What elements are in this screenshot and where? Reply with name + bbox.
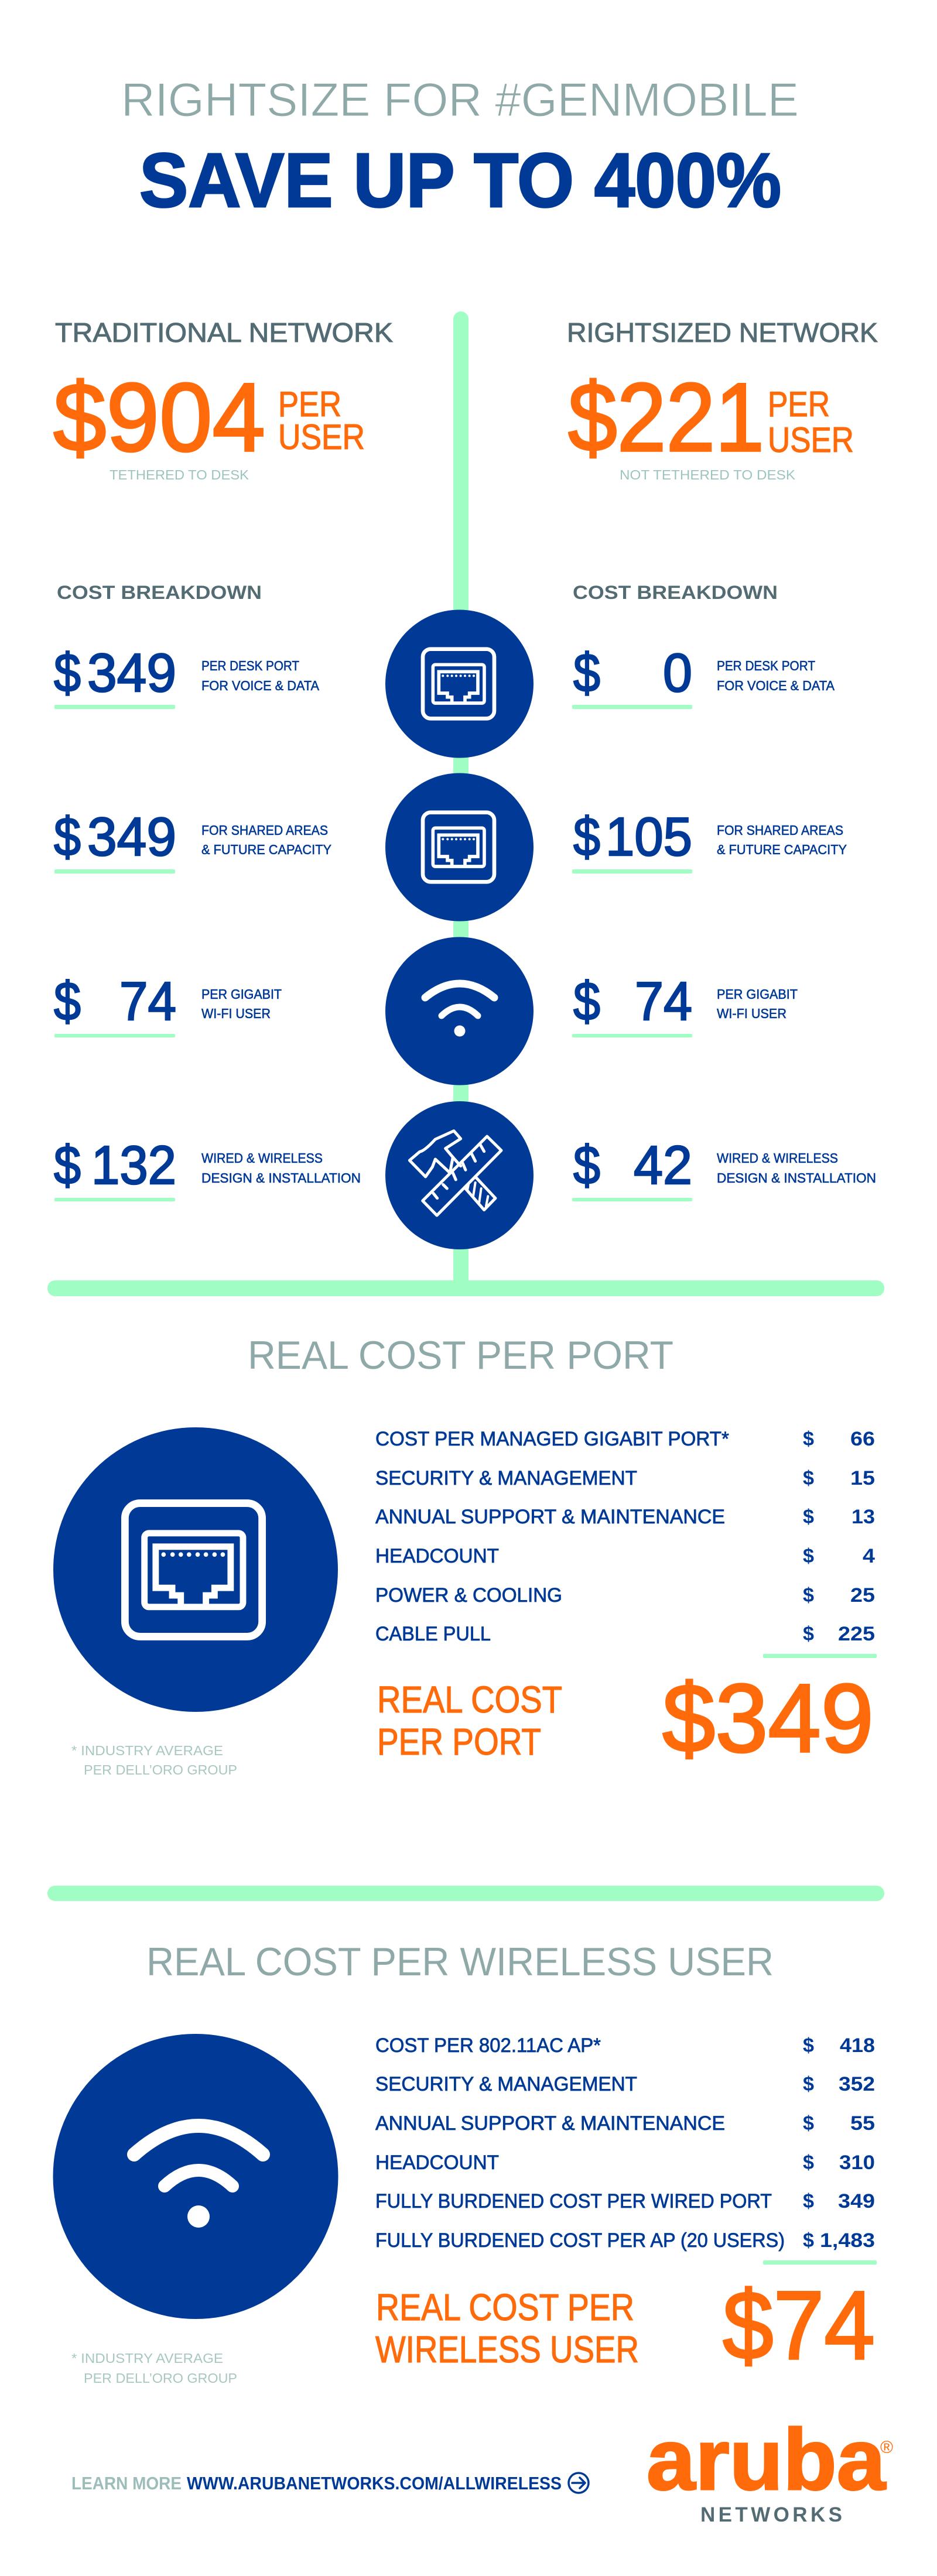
row 2 left: shared areas: & FUTURE CAPACITY <box>201 842 331 857</box>
table: cost per wireless user: FULLY BURDENED COST PER AP (20 USERS) <box>375 2229 785 2252</box>
icon: wifi large circle <box>53 2034 338 2319</box>
table: cost per wireless user: 349 <box>838 2190 875 2212</box>
heading: real cost per port: REAL COST PER PORT <box>248 1333 673 1378</box>
table: cost per port: $ <box>803 1623 814 1645</box>
row 2 right: shared areas: $ <box>573 806 600 867</box>
row 2 right: shared areas: & FUTURE CAPACITY <box>717 842 847 857</box>
footnote: industry average wireless <box>71 2351 237 2386</box>
row 1 left: per desk port: FOR VOICE & DATA <box>201 678 320 693</box>
unit: per user <box>278 385 365 457</box>
total: real cost per wireless user: $74 <box>723 2272 875 2380</box>
row 1 left: per desk port: PER DESK PORT <box>201 658 299 673</box>
divider bar: end of cost breakdown <box>47 1280 884 1296</box>
table: cost per port: $ <box>803 1584 814 1606</box>
row 1 left: per desk port <box>54 642 320 709</box>
row 4 right: design and installation: DESIGN & INSTALLATION <box>717 1170 876 1186</box>
row 2 left: shared areas: $ <box>54 806 81 867</box>
total: real cost per port: REAL COST <box>377 1678 562 1721</box>
footnote: industry average port: * INDUSTRY AVERAGE <box>71 1743 223 1758</box>
caption: not tethered to desk: NOT TETHERED TO DESK <box>620 467 796 482</box>
row 3 left: gigabit wifi user: $ <box>54 971 81 1032</box>
table: cost per port: SECURITY & MANAGEMENT <box>375 1467 637 1489</box>
row 3 left: gigabit wifi user: WI-FI USER <box>201 1006 271 1021</box>
table: cost per wireless user: HEADCOUNT <box>375 2152 499 2174</box>
icon: ethernet port large circle <box>53 1427 338 1712</box>
table: cost per wireless user <box>375 2034 877 2265</box>
row 2 left: shared areas <box>54 806 331 873</box>
central timeline connector <box>453 311 468 1282</box>
heading: cost breakdown left: COST BREAKDOWN <box>57 582 262 603</box>
row 3 right: gigabit wifi user: $ <box>573 971 600 1032</box>
value: 221 per user: $221 <box>568 364 764 472</box>
table: cost per port: 25 <box>850 1584 875 1606</box>
row 4 right: design and installation: 42 <box>634 1135 692 1195</box>
table: cost per wireless user: 310 <box>839 2152 875 2174</box>
caption: tethered to desk: TETHERED TO DESK <box>110 467 249 482</box>
table: cost per port: HEADCOUNT <box>375 1545 499 1567</box>
table: cost per wireless user: $ <box>803 2152 814 2174</box>
row 2 left: shared areas: FOR SHARED AREAS <box>201 823 328 838</box>
logo: aruba networks: aruba <box>647 2411 887 2508</box>
table: cost per wireless user: ANNUAL SUPPORT & MAINTENANCE <box>375 2112 725 2135</box>
unit: per user: USER <box>768 420 854 460</box>
value: 904 per user: $904 <box>53 364 265 472</box>
table: cost per port: 225 <box>838 1623 875 1645</box>
table: cost per port: ANNUAL SUPPORT & MAINTENANCE <box>375 1506 725 1528</box>
learn more link: LEARN MORE <box>71 2473 182 2493</box>
total: real cost per wireless user <box>375 2272 875 2380</box>
heading: real cost per wireless user: REAL COST PER WIRELESS USER <box>146 1940 774 1984</box>
table: cost per wireless user: $ <box>803 2229 814 2252</box>
table: cost per wireless user: 418 <box>840 2034 875 2057</box>
table: cost per port: $ <box>803 1545 814 1567</box>
table: cost per port: 66 <box>850 1428 875 1450</box>
icon: hammer and ruler circle <box>385 1101 534 1249</box>
table: cost per port: $ <box>803 1467 814 1489</box>
headline: SAVE UP TO 400% <box>139 137 781 223</box>
table: cost per port <box>375 1428 877 1658</box>
row 3 right: gigabit wifi user: PER GIGABIT <box>717 986 798 1002</box>
row 4 right: design and installation: $ <box>573 1135 600 1195</box>
row 1 right: per desk port <box>572 642 835 709</box>
row 2 right: shared areas <box>572 806 847 873</box>
icon: ethernet port circle 1 <box>385 610 534 758</box>
row 1 left: per desk port: $ <box>54 642 81 703</box>
row 4 left: design and installation: 132 <box>91 1135 176 1195</box>
row 4 left: design and installation: DESIGN & INSTALLATION <box>201 1170 361 1186</box>
heading: cost breakdown right: COST BREAKDOWN <box>573 582 778 603</box>
table: cost per port: $ <box>803 1428 814 1450</box>
table: cost per wireless user: $ <box>803 2190 814 2212</box>
table: cost per wireless user: 1,483 <box>820 2229 875 2252</box>
table: cost per port: $ <box>803 1506 814 1528</box>
row 2 right: shared areas: 105 <box>606 806 692 867</box>
panel: rightsized network summary <box>567 317 878 482</box>
table: cost per wireless user: FULLY BURDENED COST PER WIRED PORT <box>375 2190 772 2212</box>
row 1 right: per desk port: 0 <box>663 642 692 703</box>
icon: arrow in circle <box>569 2473 589 2493</box>
row 3 right: gigabit wifi user: 74 <box>635 971 692 1032</box>
footnote: industry average wireless: PER DELL’ORO GROUP <box>84 2371 237 2386</box>
table: cost per port: POWER & COOLING <box>375 1584 562 1606</box>
unit: per user: USER <box>278 417 365 457</box>
table: cost per port: 15 <box>850 1467 875 1489</box>
row 3 left: gigabit wifi user: 74 <box>119 971 176 1032</box>
row 1 right: per desk port: PER DESK PORT <box>717 658 815 673</box>
heading: rightsized network: RIGHTSIZED NETWORK <box>567 317 878 348</box>
total: real cost per port <box>377 1664 874 1773</box>
unit: per user: PER <box>768 385 830 424</box>
logo: aruba networks: NETWORKS <box>700 2503 842 2526</box>
row 3 right: gigabit wifi user <box>572 971 798 1037</box>
footnote: industry average port: PER DELL’ORO GROUP <box>84 1762 237 1777</box>
row 4 right: design and installation: WIRED & WIRELESS <box>717 1150 838 1166</box>
table: cost per port: 13 <box>851 1506 875 1528</box>
unit: per user: PER <box>278 385 341 424</box>
table: cost per wireless user: $ <box>803 2073 814 2095</box>
icon: ethernet port circle 2 <box>385 773 534 922</box>
row 3 left: gigabit wifi user <box>54 971 282 1037</box>
heading: traditional network: TRADITIONAL NETWORK <box>55 317 393 348</box>
table: cost per port: COST PER MANAGED GIGABIT PORT* <box>375 1428 729 1450</box>
row 1 right: per desk port: $ <box>573 642 600 703</box>
title: RIGHTSIZE FOR #GENMOBILE <box>121 74 799 126</box>
unit: per user <box>768 385 854 460</box>
icon: wifi circle <box>385 937 534 1085</box>
total: real cost per wireless user: REAL COST PER <box>376 2286 634 2328</box>
table: cost per wireless user: COST PER 802.11AC AP* <box>375 2034 601 2057</box>
row 4 right: design and installation <box>572 1135 876 1201</box>
panel: traditional network summary <box>53 317 393 482</box>
row 1 left: per desk port: 349 <box>87 642 176 703</box>
row 4 left: design and installation: WIRED & WIRELESS <box>201 1150 323 1166</box>
row 4 left: design and installation <box>54 1135 361 1201</box>
row 2 right: shared areas: FOR SHARED AREAS <box>717 823 843 838</box>
table: cost per wireless user: SECURITY & MANAGEMENT <box>375 2073 637 2095</box>
row 2 left: shared areas: 349 <box>87 806 176 867</box>
learn more link: WWW.ARUBANETWORKS.COM/ALLWIRELESS <box>187 2473 562 2493</box>
divider bar: wireless section <box>47 1886 884 1901</box>
logo: aruba networks: ® <box>880 2438 893 2457</box>
total: real cost per port: PER PORT <box>377 1721 541 1763</box>
table: cost per wireless user: $ <box>803 2034 814 2057</box>
total: real cost per wireless user: WIRELESS USER <box>375 2328 639 2371</box>
row 3 left: gigabit wifi user: PER GIGABIT <box>201 986 282 1002</box>
table: cost per wireless user: 55 <box>850 2112 875 2135</box>
table: cost per wireless user: 352 <box>839 2073 875 2095</box>
row 3 right: gigabit wifi user: WI-FI USER <box>717 1006 786 1021</box>
row 1 right: per desk port: FOR VOICE & DATA <box>717 678 835 693</box>
total: real cost per port: $349 <box>662 1664 874 1773</box>
table: cost per port: 4 <box>863 1545 875 1567</box>
footnote: industry average port <box>71 1743 237 1777</box>
table: cost per port: CABLE PULL <box>375 1623 491 1645</box>
footnote: industry average wireless: * INDUSTRY AVERAGE <box>71 2351 223 2366</box>
table: cost per wireless user: $ <box>803 2112 814 2135</box>
row 4 left: design and installation: $ <box>54 1135 81 1195</box>
